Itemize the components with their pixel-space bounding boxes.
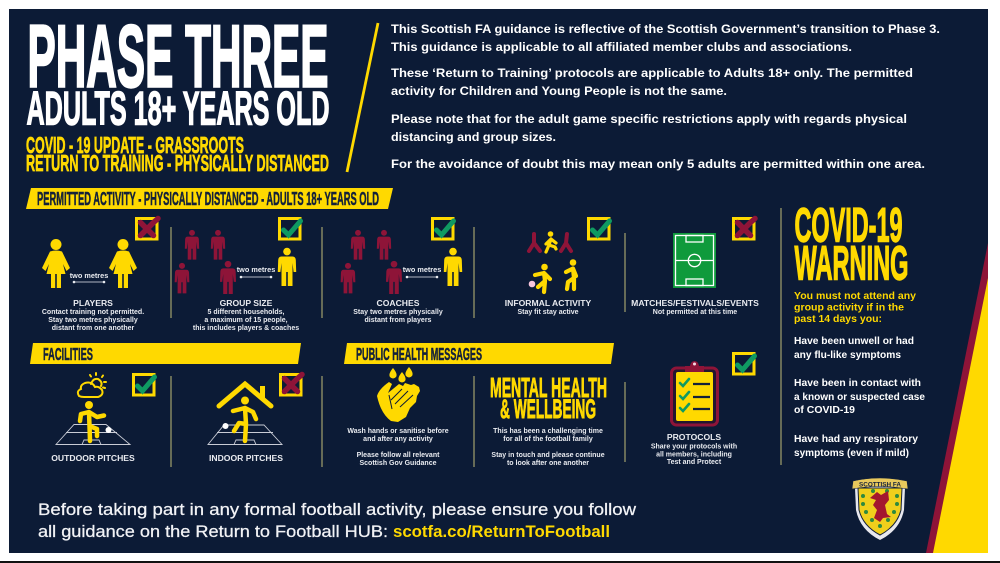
panel: mental health and wellbeing: MENTAL HEALTH <box>490 372 607 403</box>
panel: group size: this includes players & coaches <box>193 325 299 332</box>
panel: coaches: two metres <box>403 265 441 274</box>
panel: mental health and wellbeing: to look after one another <box>507 460 589 467</box>
panel: mental health and wellbeing <box>490 372 607 467</box>
panel: indoor pitches <box>208 374 302 463</box>
banner: permitted activity: PERMITTED ACTIVITY - PHYSICALLY DISTANCED - ADULTS 18+ YEARS OLD <box>37 188 379 209</box>
panel: covid-19 warning: of COVID-19 <box>794 405 855 416</box>
panel: matches festivals events <box>631 218 759 316</box>
panel: outdoor pitches: OUTDOOR PITCHES <box>51 453 135 463</box>
yellow corner stripe <box>933 278 988 553</box>
panel: mental health and wellbeing: & WELLBEING <box>500 394 596 424</box>
panel: hand washing: Wash hands or sanitise before <box>347 428 449 435</box>
panel: protocols: all members, including <box>656 452 732 458</box>
panel: group size: 5 different households, <box>207 309 285 316</box>
panel: group size: a maximum of 15 people, <box>204 317 288 324</box>
panel: covid-19 warning: Have had any respiratory <box>794 434 918 445</box>
panel: coaches: Stay two metres physically <box>353 309 443 316</box>
panel: protocols <box>651 354 754 466</box>
panel: mental health and wellbeing: for all of the football family <box>503 436 593 443</box>
panel: mental health and wellbeing: Stay in touch and please continue <box>491 452 605 459</box>
panel: covid-19 warning: any flu-like symptoms <box>794 350 901 361</box>
panel: covid-19 warning: Have been in contact with <box>794 378 921 389</box>
panel: outdoor pitches <box>51 373 154 463</box>
panel: mental health and wellbeing: This has been a challenging time <box>493 428 603 435</box>
panel: coaches <box>341 218 462 324</box>
panel: protocols: Share your protocols with <box>651 444 737 450</box>
footer call to action: Before taking part in any formal football activity, please ensure you follow <box>38 501 636 519</box>
intro text: This guidance is applicable to all affiliated member clubs and associations. <box>391 40 852 54</box>
panel: informal activity <box>505 218 610 316</box>
banner: facilities <box>30 343 301 364</box>
panel: protocols: PROTOCOLS <box>667 432 721 442</box>
panel: group size: GROUP SIZE <box>220 298 273 308</box>
panel: players: PLAYERS <box>73 298 113 308</box>
icon: scottish fa crest <box>852 478 908 540</box>
panel: covid-19 warning <box>794 200 925 459</box>
banner: public health messages: PUBLIC HEALTH MESSAGES <box>356 344 482 364</box>
maroon corner stripe <box>926 243 988 553</box>
panel: hand washing: Please follow all relevant <box>357 452 440 459</box>
panel: indoor pitches: INDOOR PITCHES <box>209 453 283 463</box>
panel: hand washing: and after any activity <box>363 436 433 443</box>
title block: COVID - 19 UPDATE - GRASSROOTS <box>26 132 244 158</box>
panel: group size <box>175 218 300 332</box>
intro text: For the avoidance of doubt this may mean only 5 adults are permitted within one area. <box>391 157 925 171</box>
panel: players: distant from one another <box>52 325 134 332</box>
panel: matches festivals events: Not permitted at this time <box>653 309 737 316</box>
panel: coaches: distant from players <box>365 317 432 324</box>
panel: covid-19 warning: a known or suspected case <box>794 392 925 403</box>
panel: group size: two metres <box>237 265 275 274</box>
panel: covid-19 warning: group activity if in the <box>794 302 904 314</box>
icon: scottish fa crest: SCOTTISH FA <box>859 482 902 488</box>
footer call to action: scotfa.co/ReturnToFootball <box>393 523 610 541</box>
panel: hand washing: Scottish Gov Guidance <box>359 460 437 467</box>
panel: players <box>42 218 158 332</box>
panel: hand washing <box>347 367 449 467</box>
intro text: These ‘Return to Training’ protocols are applicable to Adults 18+ only. The permitted <box>391 66 913 80</box>
footer call to action: all guidance on the Return to Football HUB: <box>38 523 388 541</box>
footer call to action <box>38 501 636 541</box>
intro text: This Scottish FA guidance is reflective of the Scottish Government’s transition to Phase 3. <box>391 22 940 36</box>
banner: facilities: FACILITIES <box>43 344 93 364</box>
panel: covid-19 warning: past 14 days you: <box>794 313 882 325</box>
panel: covid-19 warning: Have been unwell or had <box>794 336 914 347</box>
intro text: activity for Children and Young People is not the same. <box>391 84 727 98</box>
title block: RETURN TO TRAINING - PHYSICALLY DISTANCED <box>26 150 329 176</box>
panel: covid-19 warning: symptoms (even if mild) <box>794 448 909 459</box>
slash divider <box>347 23 378 172</box>
intro text: distancing and group sizes. <box>391 130 556 144</box>
panel: players: two metres <box>70 271 108 280</box>
panel: players: Contact training not permitted. <box>42 309 144 316</box>
banner: permitted activity <box>26 188 393 209</box>
intro text <box>391 22 940 171</box>
panel: protocols: Test and Protect <box>667 459 722 466</box>
panel: players: Stay two metres physically <box>48 317 138 324</box>
infographic canvas: PHASE THREE <box>28 6 328 106</box>
intro text: Please note that for the adult game specific restrictions apply with regards physical <box>391 112 907 126</box>
panel: covid-19 warning: You must not attend any <box>794 290 916 302</box>
panel: coaches: COACHES <box>377 298 420 308</box>
title block: ADULTS 18+ YEARS OLD <box>26 82 330 134</box>
panel: matches festivals events: MATCHES/FESTIVALS/EVENTS <box>631 298 759 308</box>
panel: informal activity: INFORMAL ACTIVITY <box>505 298 591 308</box>
title block <box>26 6 330 176</box>
panel: informal activity: Stay fit stay active <box>517 309 579 316</box>
